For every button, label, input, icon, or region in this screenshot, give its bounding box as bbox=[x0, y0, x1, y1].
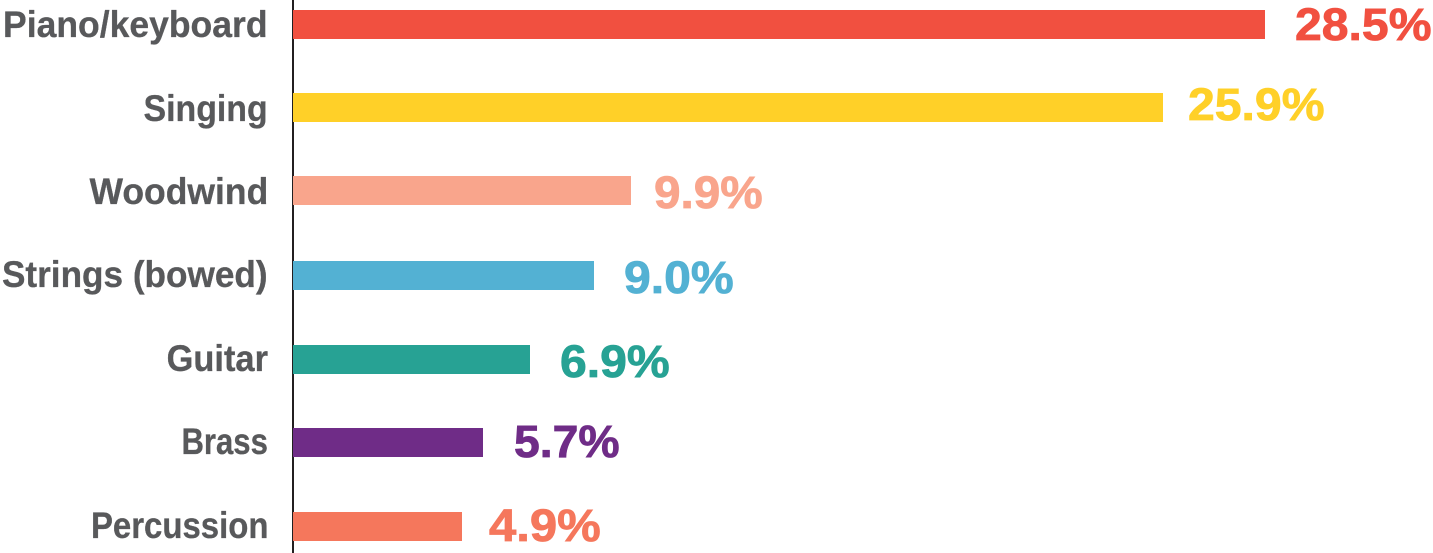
row: Singing: 25.9% bbox=[1188, 79, 1325, 130]
row: Piano/keyboard: Piano/keyboard bbox=[3, 4, 268, 45]
row: Brass: Brass bbox=[182, 421, 268, 462]
row: Percussion: Percussion bbox=[90, 505, 268, 546]
row: Singing bbox=[144, 79, 1325, 130]
axis line bbox=[292, 0, 294, 553]
row: Strings (bowed) bbox=[2, 252, 734, 303]
row: Percussion bbox=[90, 500, 601, 551]
row: Woodwind bbox=[89, 167, 763, 218]
row: Brass: 5.7% bbox=[514, 416, 620, 467]
row: Piano/keyboard: 28.5% bbox=[1295, 0, 1432, 50]
row: Piano/keyboard bbox=[3, 0, 1432, 50]
row: Guitar: Guitar bbox=[167, 338, 268, 379]
row: Strings (bowed): Strings (bowed) bbox=[2, 254, 268, 295]
row: Strings (bowed): 9.0% bbox=[624, 252, 734, 303]
row: Woodwind: Woodwind bbox=[89, 171, 268, 212]
row: Brass bbox=[182, 416, 620, 467]
row: Guitar: 6.9% bbox=[560, 336, 670, 387]
row: Woodwind: 9.9% bbox=[654, 167, 763, 218]
row: Guitar bbox=[167, 336, 670, 387]
row: Percussion: 4.9% bbox=[489, 500, 601, 551]
row: Singing: Singing bbox=[144, 88, 268, 129]
